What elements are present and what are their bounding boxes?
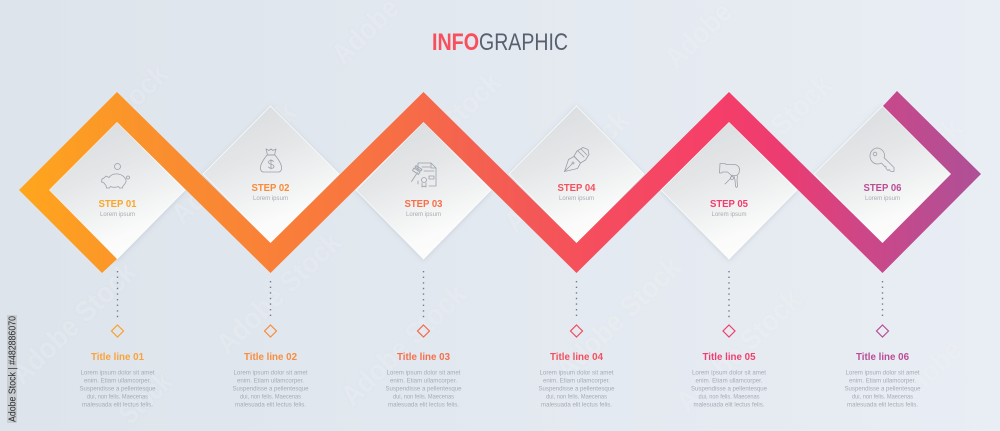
- icon: fountain pen: [564, 148, 589, 172]
- text block 06: enim. Etiam ullamcorper.: [849, 378, 916, 384]
- text block 03: enim. Etiam ullamcorper.: [390, 378, 457, 384]
- step 03 panel: [356, 122, 491, 259]
- connector 06: [876, 281, 888, 337]
- text block 05: malesuada elit lectus felis.: [694, 402, 765, 408]
- text block 01: Title line 01: [91, 351, 144, 363]
- connector 05: [723, 271, 735, 337]
- watermark pattern: Stock: [113, 366, 179, 431]
- watermark pattern: Adobe Stock: [370, 66, 508, 201]
- step label: STEP 06: [864, 182, 902, 194]
- text block 01: malesuada elit lectus felis.: [82, 402, 153, 408]
- text block 03: Lorem ipsum dolor sit amet: [386, 370, 461, 376]
- text block 01: Suspendisse a pellentesque: [80, 386, 156, 392]
- icon: piggy bank: [102, 164, 130, 188]
- step 01 panel: [49, 122, 185, 259]
- text block 05: [691, 351, 767, 408]
- connector 02: [264, 281, 276, 337]
- subtitle: Lorem ipsum: [865, 195, 900, 202]
- step 02 panel: [203, 106, 339, 243]
- marker diamond: [264, 325, 276, 337]
- step 05 panel: [661, 122, 797, 259]
- text block 03: Suspendisse a pellentesque: [386, 386, 462, 392]
- title: INFO: [432, 29, 479, 56]
- icon: money bag: [260, 149, 282, 172]
- icon: key: [870, 148, 894, 172]
- text block 04: malesuada elit lectus felis.: [541, 402, 612, 408]
- watermark pattern: Adobe Stock: [550, 251, 688, 386]
- watermark pattern: Adobe Stock: [701, 69, 839, 204]
- connector 03: [418, 271, 430, 337]
- text block 02: [232, 351, 309, 408]
- watermark pattern: Adobe Stock: [5, 256, 143, 391]
- step label: STEP 05: [710, 198, 748, 210]
- icon: hand holding keys: [720, 164, 740, 188]
- text block 04: [538, 351, 615, 408]
- text block 02: Suspendisse a pellentesque: [232, 386, 309, 392]
- step label: STEP 04: [558, 182, 596, 194]
- title: [432, 29, 568, 56]
- watermark pattern: Adobe Stock: [498, 104, 636, 239]
- text block 03: Title line 03: [397, 351, 450, 363]
- text block 06: malesuada elit lectus felis.: [847, 402, 918, 408]
- text block 05: dui, non felis. Maecenas: [698, 394, 760, 400]
- watermark pattern: Adobe Stock: [165, 96, 303, 231]
- text block 02: enim. Etiam ullamcorper.: [237, 378, 304, 384]
- stock id side label: Adobe Stock | #482886070: [6, 316, 18, 422]
- marker diamond: [418, 325, 430, 337]
- step label: STEP 02: [252, 182, 290, 194]
- text block 06: dui, non felis. Maecenas: [852, 394, 913, 400]
- step label: STEP 03: [404, 198, 443, 210]
- text block 03: [386, 351, 462, 408]
- text block 03: malesuada elit lectus felis.: [388, 402, 459, 408]
- marker diamond: [570, 325, 582, 337]
- zigzag gradient ribbon: [19, 91, 981, 273]
- marker diamond: [723, 325, 735, 337]
- watermark pattern: Adobe Stock: [210, 226, 348, 361]
- text block 04: Suspendisse a pellentesque: [538, 386, 615, 392]
- step 06 panel: [814, 106, 951, 243]
- text block 05: Suspendisse a pellentesque: [691, 386, 767, 392]
- title: GRAPHIC: [479, 29, 568, 56]
- icon: gavel and document: [412, 163, 436, 187]
- text block 04: Lorem ipsum dolor sit amet: [540, 370, 614, 376]
- subtitle: Lorem ipsum: [712, 211, 746, 218]
- text block 02: dui, non felis. Maecenas: [240, 394, 301, 400]
- subtitle: Lorem ipsum: [253, 195, 288, 202]
- text block 05: enim. Etiam ullamcorper.: [696, 378, 763, 384]
- text block 01: dui, non felis. Maecenas: [87, 394, 148, 400]
- text block 05: Lorem ipsum dolor sit amet: [692, 370, 766, 376]
- text block 05: Title line 05: [702, 351, 756, 363]
- text block 04: dui, non felis. Maecenas: [546, 394, 607, 400]
- connector 04: [570, 281, 582, 337]
- subtitle: Lorem ipsum: [100, 211, 135, 218]
- step 04 panel: [509, 106, 644, 243]
- watermark pattern: Adobe Stock: [831, 112, 969, 247]
- step label: STEP 01: [98, 198, 137, 210]
- watermark pattern: Adobe Stock: [670, 284, 808, 419]
- text block 03: dui, non felis. Maecenas: [393, 394, 454, 400]
- text block 06: Title line 06: [856, 351, 909, 363]
- subtitle: Lorem ipsum: [559, 195, 594, 202]
- text block 04: enim. Etiam ullamcorper.: [543, 378, 610, 384]
- marker diamond: [112, 325, 124, 337]
- text block 01: Lorem ipsum dolor sit amet: [80, 370, 155, 376]
- marker diamond: [876, 325, 888, 337]
- text block 02: Title line 02: [244, 351, 297, 363]
- watermark pattern: Adobe: [889, 334, 969, 413]
- text block 02: Lorem ipsum dolor sit amet: [234, 370, 308, 376]
- subtitle: Lorem ipsum: [406, 211, 441, 218]
- text block 06: Lorem ipsum dolor sit amet: [846, 370, 920, 376]
- text block 02: malesuada elit lectus felis.: [235, 402, 306, 408]
- text block 06: Suspendisse a pellentesque: [844, 386, 921, 392]
- watermark pattern: Adobe Stock: [335, 278, 473, 413]
- text block 04: Title line 04: [550, 351, 603, 363]
- text block 06: [844, 351, 921, 408]
- watermark pattern: Adobe Stock: [37, 58, 175, 193]
- connector 01: [112, 271, 124, 337]
- text block 01: enim. Etiam ullamcorper.: [84, 378, 151, 384]
- text block 01: [80, 351, 156, 408]
